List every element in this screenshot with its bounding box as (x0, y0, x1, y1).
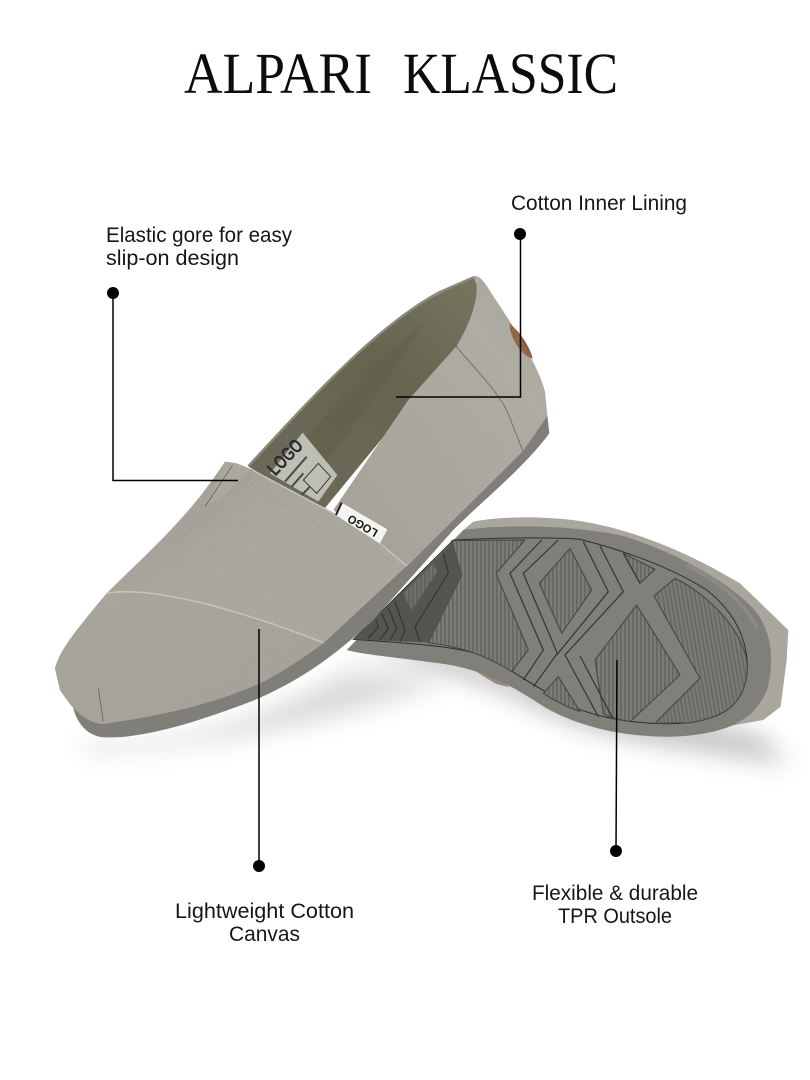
toe seam (107, 592, 323, 643)
outsole leader (610, 660, 622, 857)
front shoe outsole (73, 415, 549, 737)
heel seam (455, 345, 523, 451)
rear shoe tread base (353, 538, 747, 724)
lining rim (248, 277, 473, 466)
outsole label (532, 881, 698, 928)
heel and quarter canvas (333, 276, 547, 567)
elastic gore leader (107, 287, 238, 480)
toe crease (98, 688, 103, 722)
canvas label: Canvas (229, 922, 300, 946)
cotton lining label: Cotton Inner Lining (511, 191, 687, 215)
gore panel (205, 462, 251, 507)
cotton lining leader (396, 228, 526, 397)
lining fold shadow (280, 323, 423, 467)
tread hatched panels (428, 540, 747, 723)
toe cap (55, 592, 323, 724)
outsole label: TPR Outsole (558, 904, 672, 928)
elastic gore label (106, 223, 292, 270)
callout: cotton inner lining (396, 191, 687, 397)
insole tag: LOGO (264, 436, 308, 480)
canvas label: Lightweight Cotton (175, 899, 354, 923)
outsole label: Flexible & durable (532, 881, 698, 905)
front shoe lining (248, 277, 483, 510)
canvas label (175, 899, 354, 946)
title (184, 41, 618, 106)
tread shaded left chevrons (353, 543, 462, 643)
vamp canvas (55, 462, 407, 724)
insole tag (264, 433, 337, 502)
rear shoe showing sole (347, 517, 788, 737)
title: KLASSIC (403, 41, 618, 106)
elastic gore label: slip-on design (106, 246, 239, 270)
tread chevron ridges (368, 540, 640, 719)
elastic gore label: Elastic gore for easy (106, 223, 292, 247)
rear shoe outsole rim (347, 526, 771, 737)
canvas leader (253, 629, 265, 872)
rear shoe canvas under arch (467, 663, 510, 687)
rear shoe canvas upper (463, 517, 788, 733)
front shoe (53, 273, 553, 737)
white side label (336, 503, 387, 543)
left hatched chevron panel (403, 563, 437, 610)
vamp stitching (253, 471, 407, 566)
callout: outsole (532, 660, 698, 928)
ground shadow (80, 650, 790, 765)
callout: elastic gore (106, 223, 292, 480)
canvas texture (53, 273, 553, 730)
leather heel tab (509, 323, 533, 359)
title: ALPARI (184, 41, 372, 106)
white side label: LOGO (346, 512, 380, 538)
callout: canvas (175, 629, 354, 946)
rear shoe rim highlight (687, 565, 757, 628)
